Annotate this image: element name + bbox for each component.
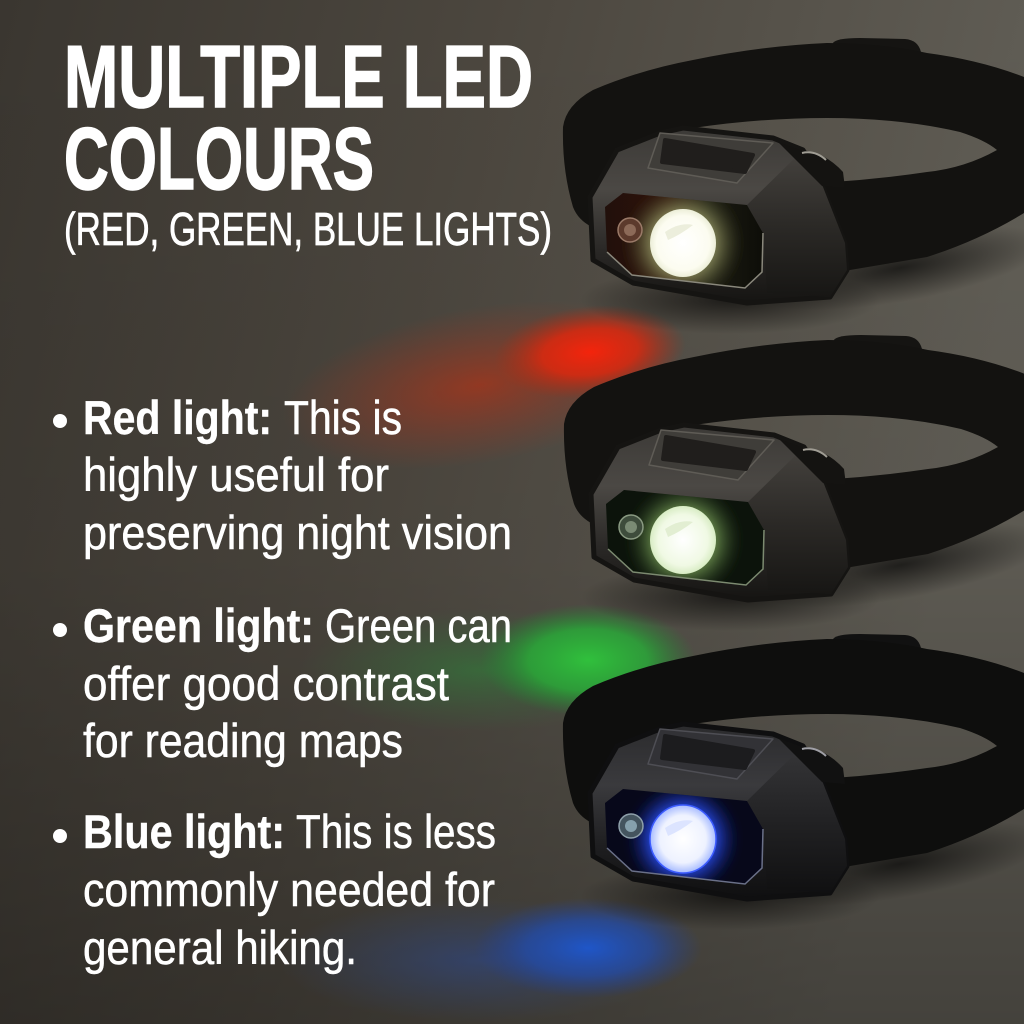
glow: red light pool: [269, 273, 691, 497]
title: COLOURS: [64, 109, 374, 208]
bullet: green light: for reading maps: [83, 714, 403, 767]
bullet: blue light: general hiking.: [83, 921, 357, 974]
bullet: blue light: commonly needed for: [83, 863, 495, 916]
subtitle: (RED, GREEN, BLUE LIGHTS): [64, 203, 552, 255]
bullet: blue light: Blue light:: [83, 805, 285, 858]
bullet: green light: Green can: [325, 599, 512, 652]
bullet: blue light: This is less: [296, 805, 496, 858]
bullet: blue light: [53, 805, 496, 974]
bullet: red light: [53, 391, 512, 559]
bullet: green light: Green light:: [83, 599, 314, 652]
headlamp: blue beam: [563, 634, 1024, 930]
glow: blue light pool: [280, 898, 702, 1022]
bullet: red light: This is: [284, 391, 402, 444]
headlamp: white beam with red side LED: [563, 38, 1024, 334]
headlamp: green beam: [564, 335, 1024, 631]
title: MULTIPLE LED: [64, 27, 533, 126]
bullet: green light: [53, 599, 512, 767]
bullet: red light: Red light:: [83, 391, 272, 444]
bullet: red light: highly useful for: [83, 448, 389, 501]
glow: green light pool: [300, 604, 696, 732]
bullet: green light: offer good contrast: [83, 657, 449, 710]
title: [64, 27, 533, 208]
bullet: red light: preserving night vision: [83, 506, 512, 559]
